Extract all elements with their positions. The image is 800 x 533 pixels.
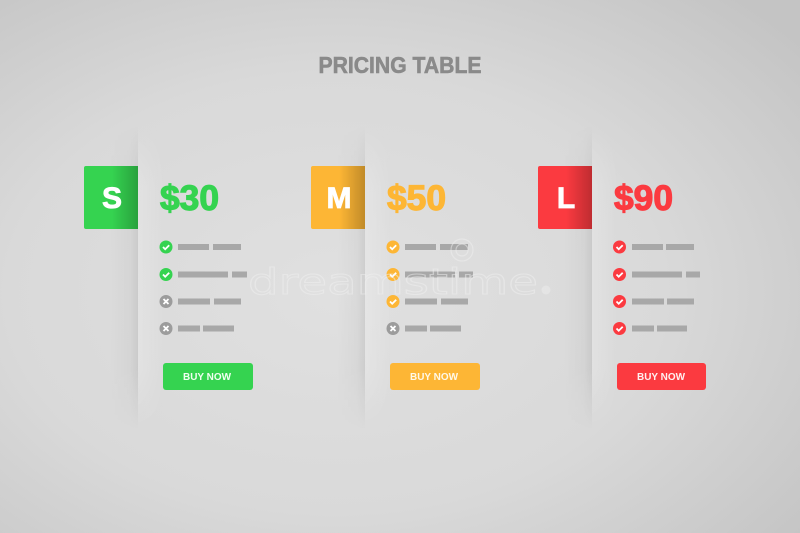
price $50: $50 — [387, 179, 446, 218]
buy button — [617, 363, 706, 390]
size tab L — [538, 166, 592, 229]
feature 3 — [386, 295, 468, 308]
watermark — [248, 239, 550, 303]
panel shadow: medium — [358, 156, 365, 400]
feature 1 — [386, 240, 468, 254]
feature 4 unavailable — [386, 322, 461, 335]
feature 2 — [613, 268, 700, 281]
size tab S — [84, 166, 138, 229]
feature 1 — [613, 240, 694, 254]
panel: large plan — [538, 156, 706, 400]
buy button: BUY NOW — [410, 371, 458, 383]
buy button: BUY NOW — [637, 371, 685, 383]
size tab M: M — [326, 182, 352, 215]
buy button — [390, 363, 480, 390]
panel shadow: small — [132, 156, 138, 400]
panel: small plan — [84, 156, 253, 400]
feature 4 — [613, 322, 687, 335]
feature 3 — [613, 295, 694, 308]
panel shadow: large — [586, 156, 592, 400]
feature 4 unavailable — [160, 322, 234, 335]
title: PRICING TABLE — [318, 52, 482, 78]
feature 3 unavailable — [160, 295, 241, 308]
feature 2 — [386, 268, 473, 281]
watermark: dreamstime — [248, 262, 538, 303]
price $90: $90 — [614, 179, 673, 218]
size tab L: L — [557, 182, 575, 215]
buy button — [163, 363, 253, 390]
panel: medium plan — [311, 156, 480, 400]
size tab S: S — [102, 182, 122, 215]
buy button: BUY NOW — [183, 371, 231, 383]
feature 2 — [160, 268, 247, 281]
size tab M — [311, 166, 365, 229]
feature 1 — [160, 240, 241, 254]
price $30: $30 — [160, 179, 219, 218]
